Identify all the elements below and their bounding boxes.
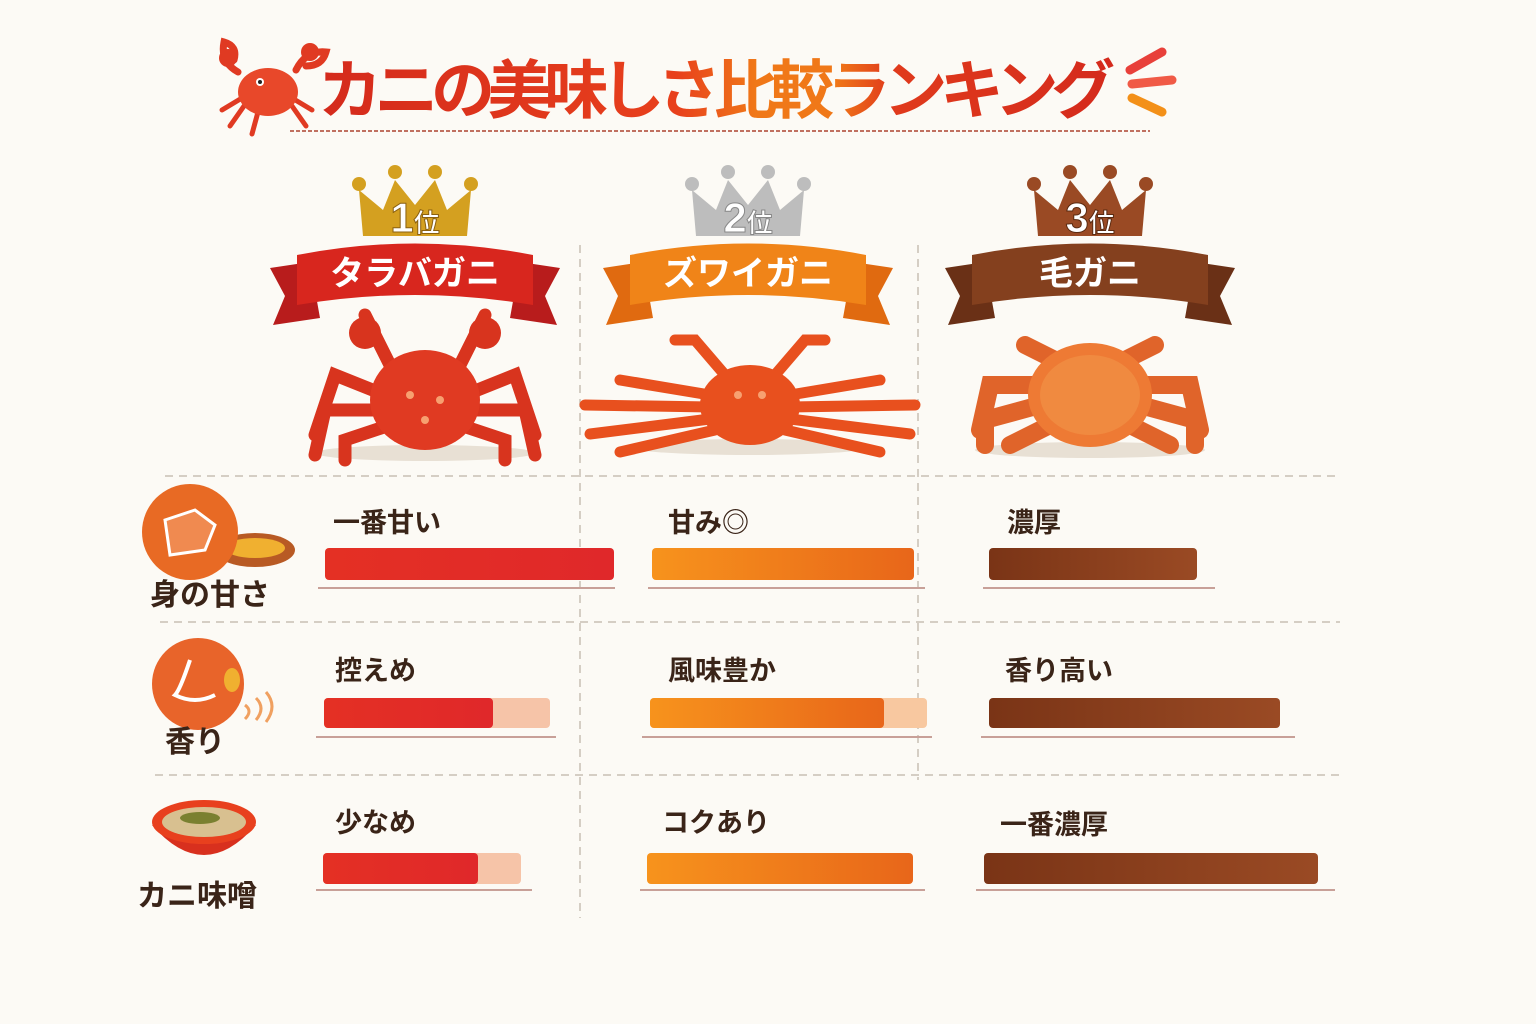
crown: 2位	[685, 165, 811, 241]
rank 1 header	[270, 165, 560, 325]
bars: row 2: 香り高い	[1005, 656, 1113, 686]
ribbon: タラバガニ	[270, 244, 560, 325]
icon: crab	[219, 42, 326, 134]
rank 2 header	[603, 165, 893, 325]
rank 3 header	[945, 165, 1235, 325]
row label: 香り: 香り	[165, 726, 225, 759]
bars: row 2: 風味豊か	[668, 656, 776, 686]
column dividers	[155, 245, 1340, 918]
crown: 3位: 3位	[1065, 194, 1115, 241]
row label: カニ味噌	[137, 800, 257, 913]
bars: row 1	[318, 508, 1215, 588]
row label: カニ味噌: カニ味噌	[137, 880, 257, 913]
row label: 身の甘さ: 身の甘さ	[150, 579, 270, 612]
crab: 毛ガニ	[975, 343, 1205, 458]
crown: 2位: 2位	[723, 194, 773, 241]
ribbon: タラバガニ: タラバガニ	[330, 255, 500, 293]
row label: 香り	[152, 638, 272, 759]
crown: 1位	[352, 165, 478, 241]
bars: row 3: コクあり	[662, 808, 770, 838]
ribbon: ズワイガニ: ズワイガニ	[663, 254, 833, 293]
title	[219, 42, 1172, 134]
icon: crab meat	[142, 484, 295, 580]
bars: row 1: 濃厚	[1007, 508, 1061, 538]
icon: nose	[152, 638, 272, 730]
bars: row 1: 一番甘い	[333, 508, 441, 538]
crab: ズワイガニ	[585, 340, 915, 455]
crown: 3位	[1027, 165, 1153, 241]
title: カニの美味しさ比較ランキング	[318, 55, 1114, 127]
ribbon: ズワイガニ	[603, 244, 893, 325]
bars: row 1: 甘み◎	[668, 508, 749, 538]
bars: row 3: 少なめ	[335, 808, 416, 838]
icon: burst lines	[1130, 52, 1172, 112]
icon: miso bowl	[152, 800, 256, 855]
bars: row 3: 一番濃厚	[1000, 810, 1108, 840]
bars: row 2: 控えめ	[335, 656, 416, 686]
bars: row 2	[316, 656, 1295, 737]
crab: タラバガニ	[315, 315, 535, 461]
crown: 1位: 1位	[390, 194, 440, 241]
ribbon: 毛ガニ: 毛ガニ	[1039, 255, 1141, 293]
ribbon: 毛ガニ	[945, 244, 1235, 325]
bars: row 3	[316, 808, 1335, 890]
row label: 身の甘さ	[142, 484, 295, 612]
